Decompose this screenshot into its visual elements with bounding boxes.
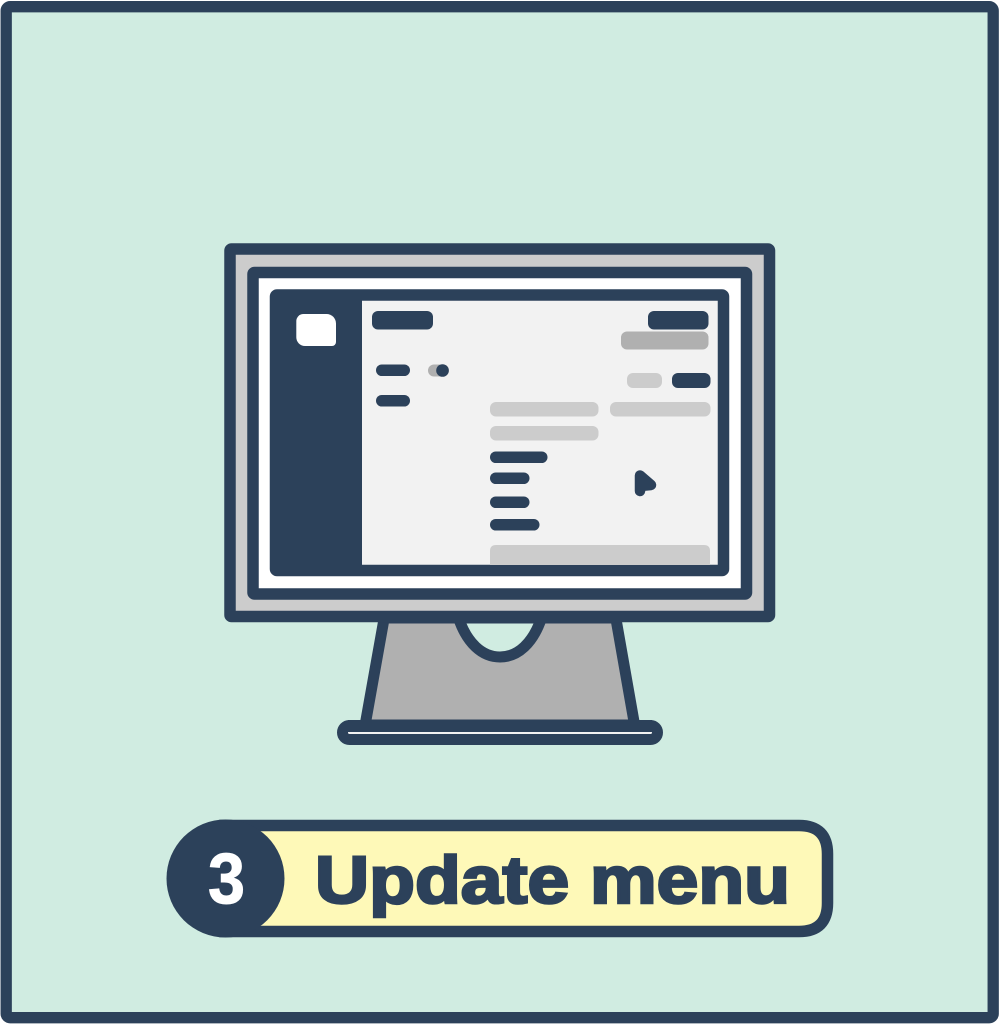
list row 4 bbox=[490, 519, 540, 530]
top right grey field bbox=[621, 332, 708, 350]
menu title bar bbox=[372, 311, 433, 330]
window background bbox=[276, 295, 724, 570]
label background bbox=[225, 826, 828, 932]
step number badge bbox=[166, 820, 284, 938]
logo bbox=[296, 314, 336, 346]
list row 2 bbox=[490, 472, 530, 484]
save button bbox=[672, 373, 710, 388]
stand base bbox=[342, 726, 658, 740]
base inner line cover bbox=[348, 720, 652, 732]
app window bbox=[275, 295, 724, 570]
step label pill bbox=[166, 820, 828, 938]
illustration: desktop monitor bbox=[230, 249, 770, 740]
screen frame bbox=[253, 272, 746, 594]
step number: 3 bbox=[208, 840, 245, 919]
list row 1 bbox=[490, 452, 548, 463]
top right button bbox=[648, 311, 708, 330]
stand cutout bbox=[458, 618, 542, 657]
menu item 2 bbox=[376, 395, 410, 406]
cancel button bbox=[627, 373, 662, 388]
monitor stand bbox=[342, 618, 658, 740]
stand neck bbox=[365, 618, 635, 725]
toggle track bbox=[428, 364, 449, 376]
form field 1 bbox=[490, 402, 598, 416]
monitor bezel bbox=[230, 249, 770, 616]
label text: Update menu bbox=[315, 843, 790, 918]
toggle bbox=[428, 364, 449, 377]
form field 3 bbox=[490, 426, 598, 440]
icon: mouse cursor bbox=[640, 476, 651, 491]
menu item 1 bbox=[376, 364, 410, 376]
sidebar bbox=[275, 295, 362, 570]
form field 2 bbox=[610, 402, 710, 416]
toggle knob bbox=[436, 364, 449, 377]
bottom grey panel bbox=[490, 545, 710, 565]
list row 3 bbox=[490, 496, 530, 508]
